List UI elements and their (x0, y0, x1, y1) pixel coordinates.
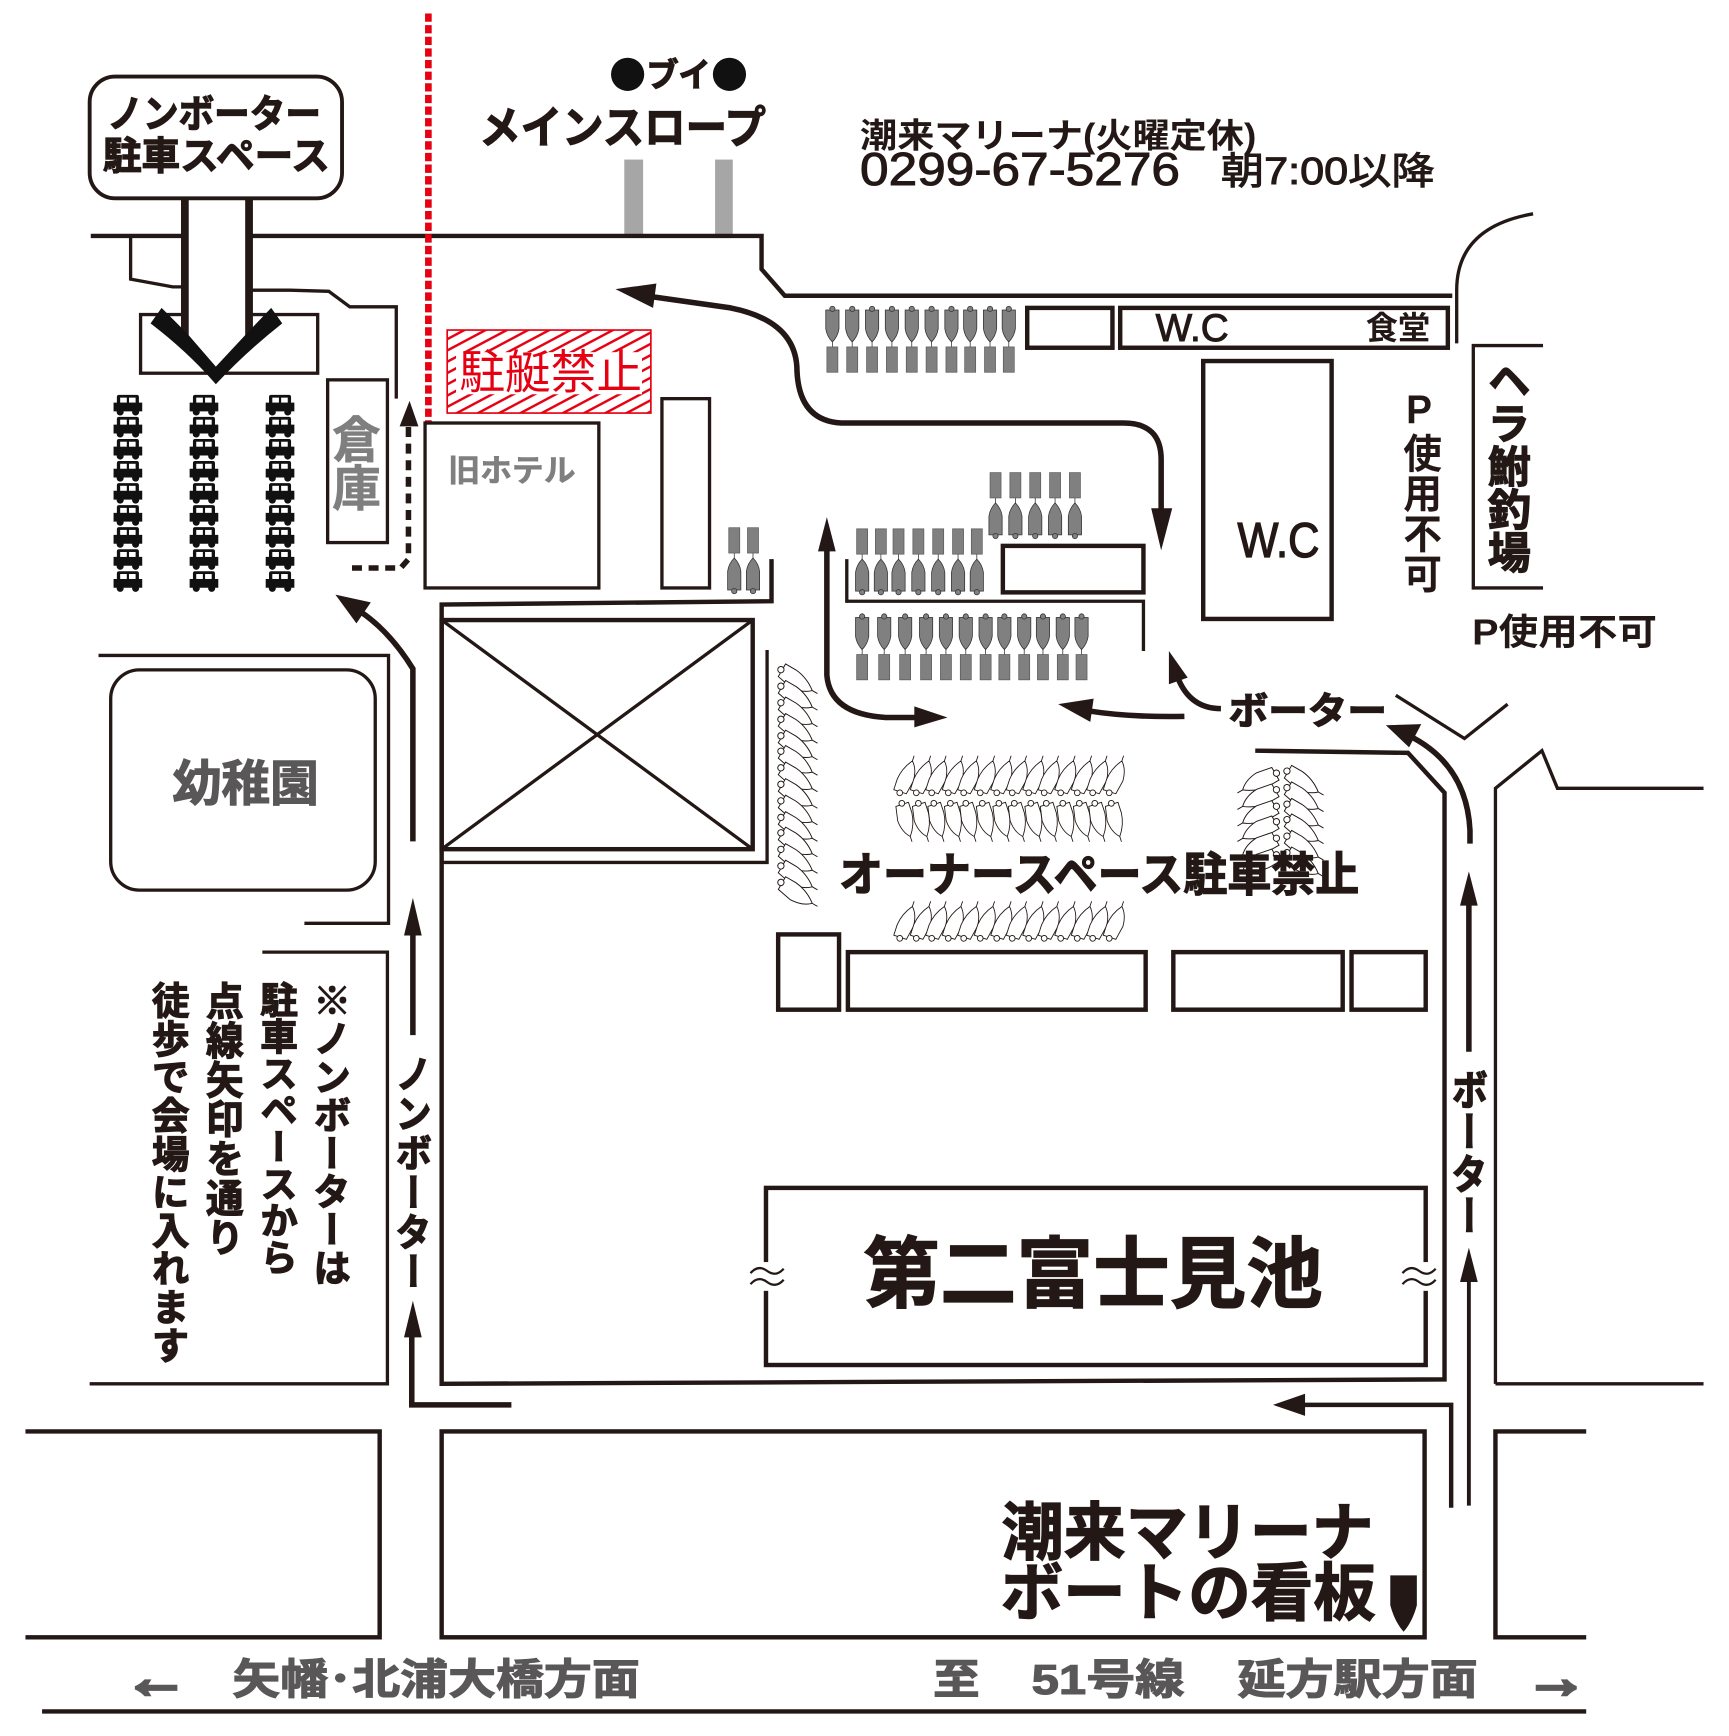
right road outline (1495, 751, 1704, 1384)
label: parking unavailable vertical: P使用不可 (1398, 388, 1442, 593)
arrow: boater straight lower (1460, 1248, 1478, 1506)
notch road (1396, 695, 1508, 738)
rectangle under parking arrow (141, 315, 318, 373)
note text: 駐車スペースから (255, 981, 297, 1275)
arrow: boater up (1169, 651, 1221, 709)
warehouse: 倉 (332, 414, 381, 468)
old hotel: 旧ホテル (448, 454, 576, 489)
direction label right: → (1525, 1647, 1587, 1709)
contact info: 0299-67-5276 (860, 143, 1180, 195)
crossed-out building (442, 620, 753, 849)
label: marina boat sign (1001, 1498, 1376, 1629)
outline boats row 3 (893, 899, 1130, 944)
arrow: non-boater route upper (335, 595, 413, 841)
lower left block outline (90, 952, 387, 1384)
outline boats row 1 (893, 753, 1130, 798)
arrow: boater straight upper (1460, 871, 1478, 1052)
heading: main slope: メインスロープ (479, 104, 766, 153)
gray boats pair E (728, 528, 760, 594)
buoy posts (624, 160, 733, 237)
upper building strip boxes: W.C (1156, 307, 1229, 350)
shoreline road outline (91, 236, 1452, 296)
arrow: exit route curve (615, 284, 1172, 550)
note text: 点線矢印を通り (200, 981, 243, 1257)
outline boats left column (773, 662, 822, 913)
label: parking unavailable horizontal: P使用不可 (1472, 611, 1657, 652)
direction label left: ← (124, 1647, 188, 1709)
no boat parking hatched box (447, 330, 651, 413)
boater label vertical: ボーター (1446, 1068, 1487, 1237)
pond: 第二富士見池 (863, 1232, 1323, 1318)
central building and pier lines (847, 546, 1143, 651)
large W.C building (1203, 361, 1332, 619)
callout: non-boater parking sign with arrow: ノンボーター (107, 93, 321, 136)
arrow: non-boater route lower (404, 1301, 511, 1405)
upper building strip boxes: 食堂 (1366, 310, 1430, 346)
contact info: 潮来マリーナ(火曜定休) (860, 117, 1256, 155)
arrow: boater left turn (1273, 1394, 1451, 1508)
note text (146, 981, 350, 1364)
narrow building (662, 399, 710, 588)
direction label right: 至 (933, 1656, 980, 1703)
kindergarten: 幼稚園 (173, 757, 319, 811)
direction label right (933, 1647, 1587, 1709)
icon: boat sign (1390, 1575, 1417, 1632)
bottom road line (42, 1709, 1586, 1713)
arrow: non-boater route middle (404, 898, 422, 1035)
warehouse: 庫 (332, 463, 381, 517)
road line around building block (442, 559, 1445, 1384)
gray boats row B (989, 473, 1082, 539)
label: marina boat sign: ボートの看板 (1001, 1559, 1376, 1629)
red boundary dotted line (425, 13, 431, 423)
dotted walking arrow (352, 401, 418, 568)
gray boats row D (856, 614, 1088, 680)
upper left building outline (131, 236, 396, 399)
kindergarten (99, 655, 389, 923)
warehouse (328, 380, 387, 543)
upper right curved road (1457, 214, 1533, 343)
wall beside crossed building (442, 650, 767, 862)
non-boater route label: ノンボーター (390, 1054, 431, 1291)
callout: non-boater parking sign with arrow: 駐車スペース (103, 136, 330, 179)
lower row buildings (778, 934, 1426, 1010)
arrow: boater turn (1386, 724, 1470, 844)
old hotel (425, 423, 599, 588)
gray boats row C (856, 529, 983, 595)
heading: buoy (611, 57, 746, 95)
note text: 徒歩で会場に入れます (146, 981, 189, 1364)
no boat parking hatched box: 駐艇禁止 (459, 347, 642, 399)
arrow: boater left (1058, 699, 1184, 722)
outline boats row 2 (892, 799, 1130, 844)
direction label left (124, 1647, 640, 1709)
label: marina boat sign: 潮来マリーナ (1002, 1498, 1374, 1568)
callout: non-boater parking sign with arrow (90, 77, 342, 384)
outline boats right columns (1233, 763, 1328, 883)
hera-buna fishing area (1473, 346, 1543, 588)
pond (750, 1188, 1436, 1365)
large W.C building: W.C (1238, 514, 1319, 568)
boater label horizontal: ボーター (1229, 690, 1387, 732)
gray boats row A (826, 306, 1015, 372)
direction label left: 矢幡･北浦大橋方面 (232, 1656, 640, 1703)
lower city blocks (25, 1431, 1586, 1637)
direction label right: 延方駅方面 (1238, 1656, 1478, 1703)
contact info (860, 117, 1435, 195)
car parking rows (114, 395, 294, 592)
upper building strip boxes (1027, 307, 1448, 350)
label: owner space no parking: オーナースペース駐車禁止 (839, 849, 1359, 901)
contact info: 朝7:00以降 (1221, 150, 1435, 192)
note text: ※ノンボーターは (308, 981, 350, 1286)
hera-buna fishing area: ヘラ鮒釣場 (1481, 359, 1531, 574)
arrow: launch route (818, 517, 948, 727)
heading: buoy: ブイ (646, 57, 711, 95)
direction label right: 51号線 (1032, 1656, 1184, 1703)
